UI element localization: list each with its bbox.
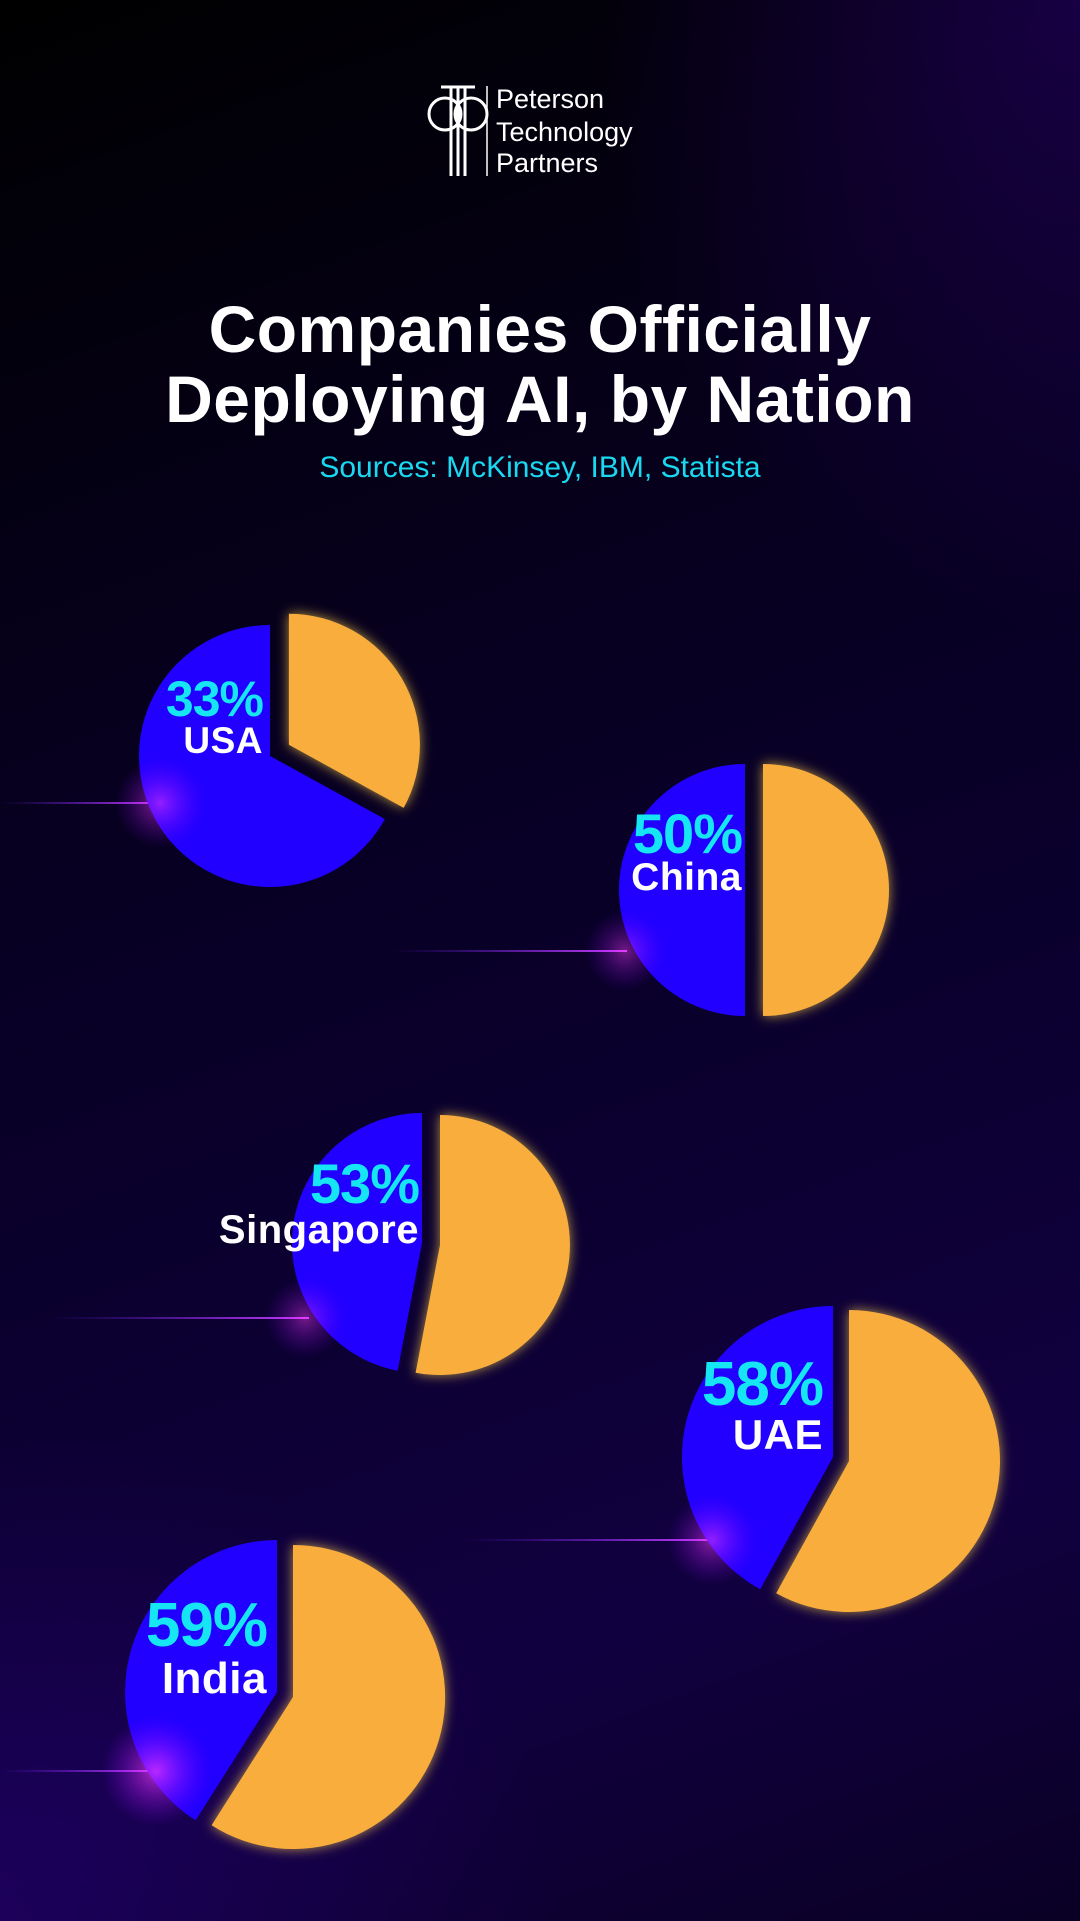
label: USA: 33% — [166, 671, 263, 727]
label: UAE: 58% — [702, 1350, 823, 1419]
logo — [428, 84, 633, 178]
label: USA: USA — [183, 720, 263, 761]
label: UAE — [702, 1350, 823, 1458]
label: Singapore — [219, 1152, 419, 1252]
title: Deploying AI, by Nation — [165, 362, 915, 436]
label: China: 50% — [633, 802, 742, 865]
label: Singapore: 53% — [310, 1152, 419, 1215]
sources: Sources: McKinsey, IBM, Statista — [319, 451, 761, 484]
label: Singapore: Singapore — [219, 1208, 419, 1252]
label: India: 59% — [146, 1591, 267, 1660]
title — [165, 292, 915, 436]
title: Companies Officially — [209, 292, 871, 366]
pie: China — [392, 764, 889, 1016]
label: USA — [166, 671, 263, 761]
pie: USA — [0, 614, 420, 887]
logo: Peterson — [496, 84, 604, 114]
logo: Partners — [496, 148, 598, 178]
logo: Technology — [496, 117, 633, 147]
label: India: India — [162, 1654, 267, 1703]
pie: Singapore — [49, 1113, 570, 1375]
label: China — [631, 802, 742, 899]
pie: India — [0, 1540, 445, 1849]
label: China: China — [631, 856, 742, 899]
label: UAE: UAE — [733, 1411, 823, 1458]
pie: UAE — [465, 1306, 1000, 1612]
label: India — [146, 1591, 267, 1703]
